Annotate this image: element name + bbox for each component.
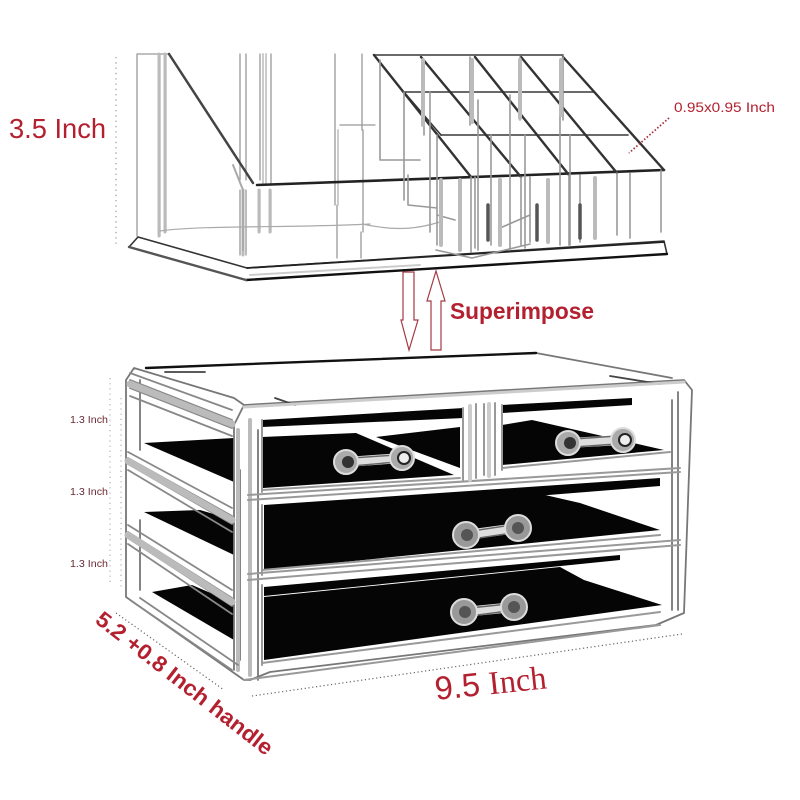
label: width: 9.5 Inch	[433, 658, 549, 708]
illustration: drawer unit bottom piece	[126, 353, 692, 680]
label: drawer heights: 1.3 Inch	[70, 486, 108, 498]
label: depth: 5.2 +0.8 Inch handle	[91, 606, 278, 760]
front drawer frames	[244, 403, 680, 680]
label: compartment size: 0.95x0.95 Inch	[674, 100, 775, 115]
label: drawer heights	[70, 378, 121, 587]
illustration: lipstick organizer top piece	[129, 54, 667, 280]
knob: drawer 1	[334, 446, 414, 474]
label: compartment size	[629, 100, 775, 153]
front rim	[257, 170, 664, 185]
knob: drawer 2	[556, 428, 635, 455]
label: superimpose: Superimpose	[450, 298, 594, 324]
black drawer liners	[144, 398, 664, 660]
arrow: down	[401, 272, 418, 350]
label: height of top piece: 3.5 Inch	[9, 113, 106, 144]
label: drawer heights: 1.3 Inch	[70, 414, 108, 426]
case outline	[126, 353, 692, 680]
label: width	[252, 634, 682, 708]
left side rails	[128, 373, 238, 670]
lipstick compartments grid	[374, 55, 664, 258]
knob: drawer 4	[451, 594, 527, 625]
diagonal side wall	[169, 54, 253, 250]
base rim	[129, 222, 667, 280]
left tower	[137, 54, 375, 258]
knob: drawer 3	[453, 515, 531, 548]
arrow: up	[427, 271, 445, 350]
label: drawer heights: 1.3 Inch	[70, 558, 108, 570]
